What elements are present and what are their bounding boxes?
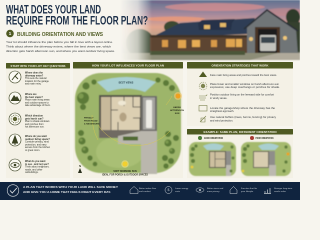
site plan illustration: FROM ROAD xyxy=(84,120,98,122)
hero photo: barndominium at dusk xyxy=(120,0,305,60)
intro paragraph: Think about where the driveway enters, where the best views are, which xyxy=(6,44,112,48)
strategy: buffers: Use natural buffers (trees, berms, fencing) for privacy xyxy=(210,115,277,119)
question: best views: the best views? xyxy=(25,96,43,99)
benefit: views xyxy=(196,187,224,193)
benefit: resale xyxy=(264,187,292,194)
question: outdoor living: outdoor living space? xyxy=(25,138,50,141)
site plan illustration: BEST VIEWS xyxy=(119,82,134,84)
question: best views: Place main living areas xyxy=(25,99,50,102)
question: harsh sun xyxy=(9,113,50,129)
footer message: AND GIVE YOU A HOME THAT FEELS RIGHT EVERY DAY. xyxy=(23,190,111,194)
site plan illustration xyxy=(75,73,184,176)
question: outdoor living: or great room. xyxy=(25,149,40,152)
question: driveway: location for the garage xyxy=(25,80,49,83)
benefit: resale: Stronger long-term xyxy=(274,187,292,190)
strategy: buffers: and wind protection. xyxy=(210,118,233,122)
benefit: views: more privacy xyxy=(207,190,220,193)
question: what to see: outbuildings. xyxy=(25,171,39,174)
section heading: building orientation and views: BUILDING ORIENTATION AND VIEWS xyxy=(17,32,104,38)
benefit: function: Function that fits xyxy=(241,187,258,190)
mini plan: good xyxy=(189,142,236,176)
benefit: flow: and comfort xyxy=(139,190,151,193)
question: what to see: roads, and other xyxy=(25,168,43,171)
site plan illustration: IDEAL FOR PORCH & OUTDOOR SPACES xyxy=(102,174,148,176)
benefit: function xyxy=(230,186,258,194)
question: best views xyxy=(9,92,51,107)
question: best views: Where are xyxy=(25,93,37,96)
intro paragraph: Your lot should influence the plan before you fall in love with a layout online. xyxy=(6,40,113,44)
title: REQUIRE FROM THE FLOOR PLAN? xyxy=(6,16,148,28)
benefit: flow xyxy=(130,186,156,194)
question: what to see xyxy=(9,159,50,174)
question: outdoor living: access from the kitchen xyxy=(25,146,51,149)
site plan illustration: PRIVACY xyxy=(84,116,94,120)
benefit: energy: Lower energy xyxy=(175,187,189,190)
footer message: A PLAN THAT WORKS WITH YOUR LAND WILL SAVE MONEY xyxy=(23,185,119,189)
panel header: lot influences: HOW YOUR LOT INFLUENCES YOUR FLOOR PLAN xyxy=(92,63,164,67)
strategy: garage: straightest approach. xyxy=(210,109,235,113)
mini plan: poor xyxy=(241,142,291,176)
panel: example same plan xyxy=(187,129,293,178)
north arrow: N xyxy=(79,164,81,168)
footer band xyxy=(0,182,300,200)
intro paragraph: direction gets harsh afternoon sun, and where you want outdoor living space. xyxy=(6,49,115,53)
question: driveway xyxy=(9,71,49,86)
footer check icon xyxy=(7,185,19,196)
benefit: resale: resale value xyxy=(274,190,287,193)
question: what to see: What do you want xyxy=(25,160,46,163)
question: driveway: driveway enter? xyxy=(25,74,44,77)
panel: key questions xyxy=(6,63,70,178)
strategy: sun xyxy=(199,82,280,90)
intro paragraph xyxy=(6,40,115,53)
strategy: wind: Position outdoor living on the leeward side for comfort xyxy=(210,92,274,96)
panel header: key questions: START WITH YOUR LOT: KEY QUESTIONS xyxy=(10,64,66,68)
question: harsh sun: Plan to shade windows xyxy=(25,120,50,123)
title xyxy=(6,4,148,28)
question: driveway: Where does the xyxy=(25,72,43,74)
strategy: buffers xyxy=(200,115,277,122)
strategy: garage: Locate the garage/shop where the driveway has the xyxy=(210,106,276,110)
question: harsh sun: gets harsh sun? xyxy=(25,117,44,120)
question: driveway: This sets the natural xyxy=(25,77,47,80)
question: what to see: Think about neighbors, xyxy=(25,166,50,169)
sun: afternoon xyxy=(174,92,182,100)
benefit: energy xyxy=(165,186,189,194)
site plan illustration: & NEIGHBORS xyxy=(84,124,100,126)
panel header: example: EXAMPLE: SAME PLAN, DIFFERENT ORIENTATION xyxy=(204,130,277,134)
question: what to see: to see - and not see? xyxy=(25,163,49,166)
question: best views: and outdoor spaces to xyxy=(25,101,49,104)
question: driveway: and main entry. xyxy=(25,83,42,86)
panel header: strategies: ORIENTATION STRATEGIES THAT WORK xyxy=(212,63,269,67)
site plan illustration: HARSH xyxy=(173,106,181,109)
section heading: building orientation and views: 1 xyxy=(9,31,12,36)
question: outdoor living xyxy=(9,134,51,152)
footer message xyxy=(23,185,119,194)
panel: orientation strategies xyxy=(187,62,293,126)
strategy: garage xyxy=(199,106,276,113)
site plan illustration: AFTERNOON xyxy=(170,109,184,112)
benefit: flow: Better indoor flow xyxy=(139,187,156,190)
benefit: energy: costs xyxy=(175,190,181,193)
benefit: views: Better views and xyxy=(207,187,224,190)
strategy: wind xyxy=(199,92,274,100)
benefit: energy: $ xyxy=(168,188,170,192)
strategy: wind: in windy areas. xyxy=(210,96,228,100)
benefit: function: your lifestyle xyxy=(241,190,254,193)
section heading: building orientation and views xyxy=(6,30,104,38)
question: harsh sun: hot afternoon sun. xyxy=(25,126,45,129)
label: good orientation: GOOD ORIENTATION xyxy=(204,137,223,140)
site plan illustration: SUN xyxy=(175,113,180,115)
question: outdoor living: Consider privacy, wind xyxy=(25,141,50,144)
strategy: sun: Place fewer and smaller windows on harsh afternoon-sun xyxy=(210,82,280,86)
panel: lot site plan xyxy=(73,62,184,178)
strategy: sun: exposures; use deep overhangs or porches for shade. xyxy=(210,85,280,89)
question: outdoor living: protection, and easy xyxy=(25,143,47,146)
strategy: views: Face main living areas and porches toward the best views. xyxy=(210,73,277,77)
question: outdoor living: Where do you want xyxy=(25,135,47,138)
site plan illustration: SOFT MORNING SUN xyxy=(113,171,137,173)
question: harsh sun: and porches from xyxy=(25,123,44,126)
label: poor orientation: POOR ORIENTATION xyxy=(256,137,274,140)
question: harsh sun: Which direction xyxy=(25,114,43,118)
title: WHAT DOES YOUR LAND xyxy=(6,4,101,16)
question: best views: take advantage of them. xyxy=(25,104,51,107)
sun: morning xyxy=(121,160,129,168)
